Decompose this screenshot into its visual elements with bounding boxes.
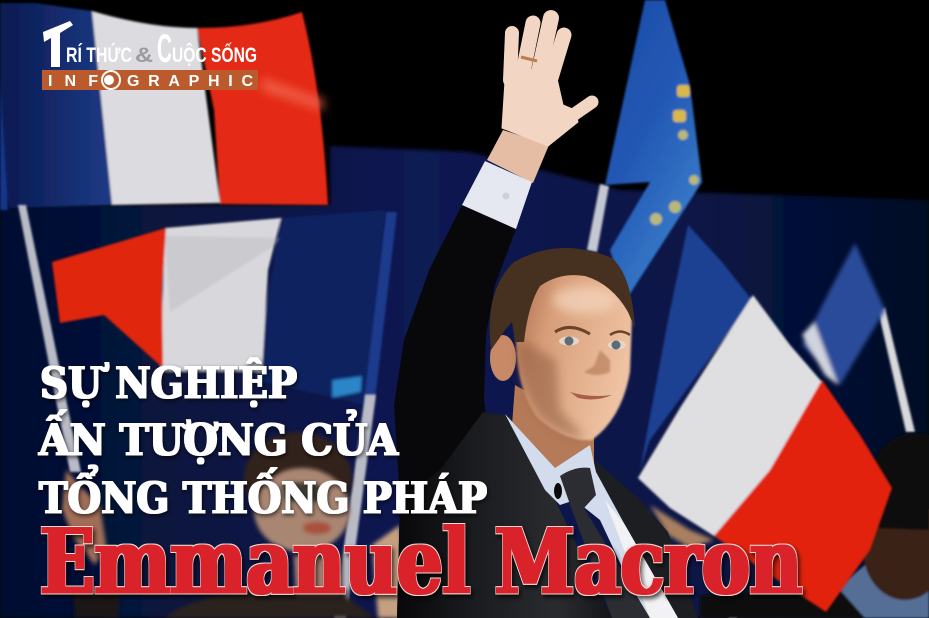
shirt	[505, 414, 678, 618]
flag: French flag top left	[0, 3, 328, 210]
headline line 2: ẤN TƯỢNG CỦA	[38, 409, 399, 466]
logo: Tri Thuc & Cuoc Song Infographic: INF	[48, 73, 98, 90]
logo band	[42, 70, 258, 90]
microphone	[554, 483, 562, 499]
jacket right side	[590, 458, 698, 618]
person: raised hand left	[62, 470, 120, 618]
logo circle O	[102, 71, 120, 89]
title: career headline	[38, 358, 487, 524]
nose shadow	[584, 350, 610, 375]
jacket body	[397, 412, 612, 618]
ear	[490, 335, 516, 381]
tie	[560, 468, 650, 618]
person: blurred skin beside flag	[650, 505, 714, 548]
person: blurred audience centre	[165, 432, 375, 618]
ring	[521, 57, 537, 61]
raised jacket sleeve	[394, 205, 516, 618]
logo wordmark: RÍ THỨC	[66, 43, 132, 67]
hair	[490, 248, 635, 350]
wrist	[487, 130, 549, 183]
logo T mark	[43, 21, 73, 67]
person: Emmanuel Macron	[394, 18, 698, 618]
flag: small blue flag right	[802, 243, 885, 385]
neck	[512, 385, 594, 472]
face	[516, 272, 632, 440]
flag: European Union flag	[605, 0, 702, 300]
logo: Tri Thuc & Cuoc Song Infographic	[42, 21, 258, 90]
mouth	[570, 392, 612, 399]
eyes and brows	[555, 327, 630, 350]
person: audience right	[700, 433, 929, 618]
logo: Tri Thuc & Cuoc Song Infographic: &	[135, 44, 153, 67]
flag: French flag centre left	[52, 210, 385, 405]
headline line 1: SỰ NGHIỆP	[40, 358, 297, 409]
logo: Tri Thuc & Cuoc Song Infographic: GRAPHIC	[127, 73, 253, 90]
shirt cuff	[462, 161, 532, 229]
headline line 3: TỔNG THỐNG PHÁP	[39, 464, 487, 524]
logo: Tri Thuc & Cuoc Song Infographic: UỘC SỐNG	[172, 43, 257, 67]
logo: Tri Thuc & Cuoc Song Infographic: C	[157, 27, 172, 71]
hand	[502, 18, 592, 146]
cheek shadow	[518, 340, 585, 438]
person: audience skin right of pole	[372, 525, 408, 618]
flag: large French flag right	[638, 225, 892, 612]
flag poles	[18, 184, 915, 618]
forehead highlight	[553, 286, 617, 314]
